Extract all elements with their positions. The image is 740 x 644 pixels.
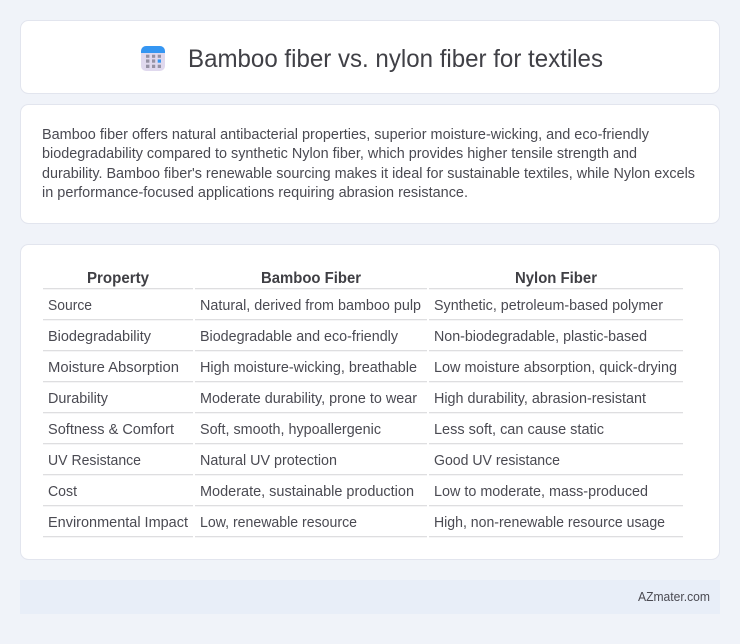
row: biodegradability: Biodegradability (48, 329, 152, 345)
panel: comparison table (20, 244, 720, 560)
row: cost: Cost (48, 484, 77, 500)
row: moisture absorption: Low moisture absorption, quick-drying (434, 360, 677, 376)
text block: summary paragraph: biodegradability compared to synthetic Nylon fiber, which provides higher tensile strength and (42, 146, 637, 162)
row: UV resistance: Good UV resistance (434, 453, 560, 469)
footer bar (20, 580, 720, 614)
row: durability: Moderate durability, prone to wear (200, 391, 417, 407)
table header row: Property (87, 270, 149, 287)
row: durability (48, 391, 646, 407)
footer source label: AZmater.com (638, 589, 710, 604)
panel: summary (20, 104, 720, 224)
row: softness and comfort: Softness & Comfort (48, 422, 174, 438)
text block: summary paragraph: durability. Bamboo fiber's renewable sourcing makes it ideal for sustainable textiles, while Nylon excels (42, 166, 695, 182)
row: moisture absorption: Moisture Absorption (48, 360, 179, 376)
row: durability: Durability (48, 391, 109, 407)
row: environmental impact: Environmental Impact (48, 515, 188, 531)
row: UV resistance: Natural UV protection (200, 453, 337, 469)
row: biodegradability: Non-biodegradable, plastic-based (434, 329, 647, 345)
text block: summary paragraph: in performance-focused applications requiring abrasion resistance. (42, 185, 468, 201)
row: cost (48, 484, 648, 500)
row: cost: Moderate, sustainable production (200, 484, 414, 500)
row: UV resistance: UV Resistance (48, 453, 141, 469)
row: environmental impact: Low, renewable resource (200, 515, 357, 531)
row: durability: High durability, abrasion-resistant (434, 391, 646, 407)
row: softness and comfort (48, 422, 604, 438)
icon: calendar (141, 46, 165, 71)
panel: title card (20, 20, 720, 94)
row: source: Source (48, 298, 92, 314)
table header row (87, 270, 597, 287)
title: Bamboo fiber vs. nylon fiber for textiles (188, 45, 603, 73)
table header row: Nylon Fiber (515, 270, 597, 287)
row: softness and comfort: Less soft, can cause static (434, 422, 604, 438)
row: UV resistance (48, 453, 560, 469)
row: moisture absorption: High moisture-wicking, breathable (200, 360, 417, 376)
row: moisture absorption (48, 360, 677, 376)
row: source: Natural, derived from bamboo pulp (200, 298, 421, 314)
table header row: Bamboo Fiber (261, 270, 361, 287)
row: environmental impact (48, 515, 665, 531)
text block: summary paragraph (42, 127, 695, 201)
row: softness and comfort: Soft, smooth, hypoallergenic (200, 422, 381, 438)
row: source: Synthetic, petroleum-based polymer (434, 298, 663, 314)
row: cost: Low to moderate, mass-produced (434, 484, 648, 500)
row: biodegradability: Biodegradable and eco-friendly (200, 329, 399, 345)
row: environmental impact: High, non-renewable resource usage (434, 515, 665, 531)
row: source (48, 298, 663, 314)
row: biodegradability (48, 329, 647, 345)
text block: summary paragraph: Bamboo fiber offers natural antibacterial properties, superior moisture-wicking, and eco-friendly (42, 127, 650, 143)
